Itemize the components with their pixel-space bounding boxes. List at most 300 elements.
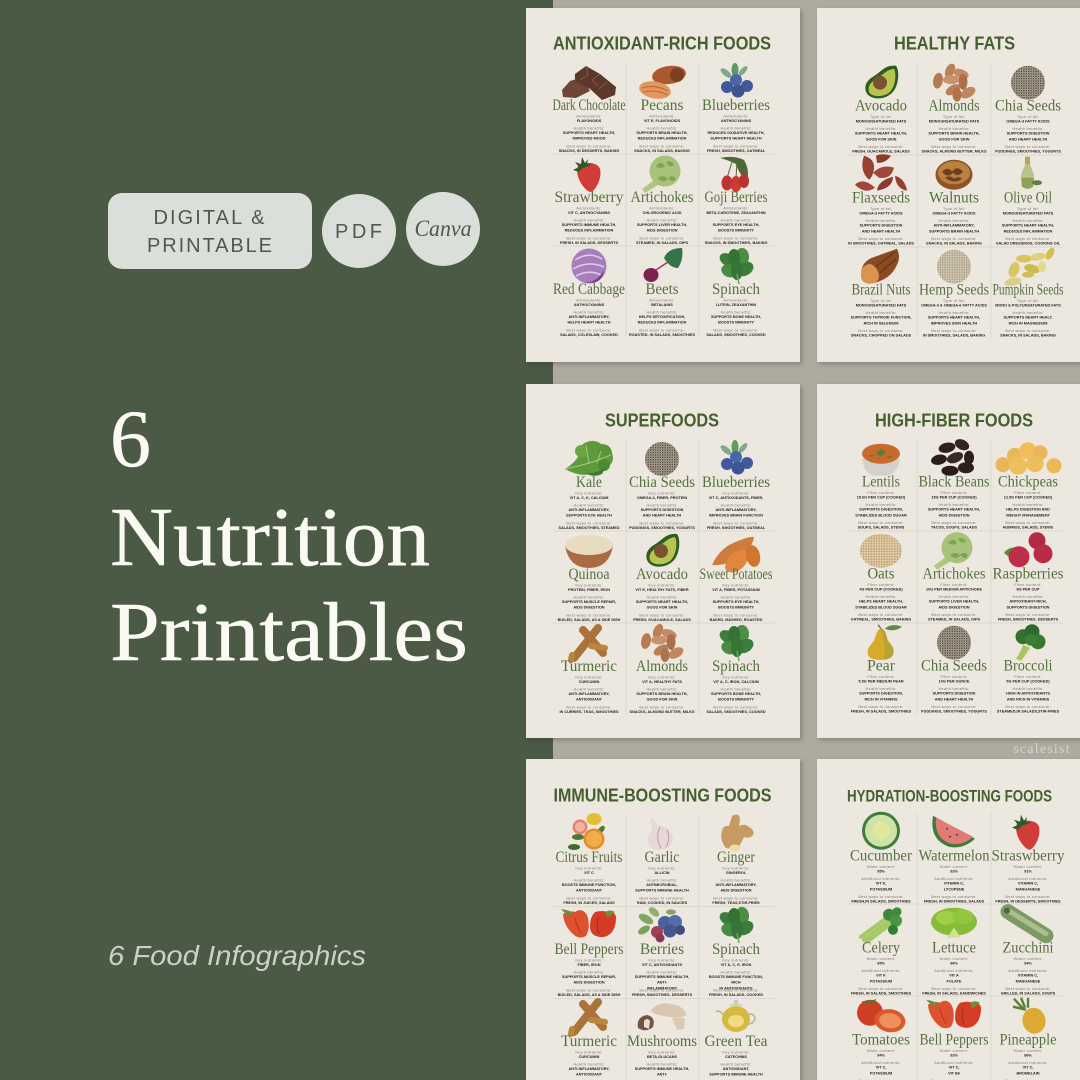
details: Best ways to consume: xyxy=(639,895,685,900)
details: Health benefits: xyxy=(720,125,752,130)
details: Best ways to consume: xyxy=(639,987,685,992)
details: FIBER, IRON xyxy=(578,963,601,967)
details: FRESH, IN SALADS, SANDWICHES xyxy=(922,992,986,996)
icon: bell peppers xyxy=(926,1000,981,1028)
details: VIT A, C, IRON, CALCIUM xyxy=(713,680,759,684)
details: HELPS DETOXIFICATION, xyxy=(639,315,685,319)
details xyxy=(851,582,911,622)
details: FRESH, IN DESSERTS, SMOOTHIES xyxy=(995,900,1061,904)
icon: oats xyxy=(860,534,902,568)
name: Beets xyxy=(646,281,678,298)
cell: Chia Seeds xyxy=(995,66,1061,154)
name: Cucumber xyxy=(850,848,913,865)
details: RICH IN MAGNESIUM xyxy=(1009,321,1047,325)
details: Fiber content: xyxy=(867,674,895,679)
details xyxy=(922,956,986,996)
details: SUPPORTS BRAIN HEALTH, xyxy=(636,692,688,696)
details: AND HEART HEALTH xyxy=(862,229,901,233)
details: Health benefits: xyxy=(938,594,970,599)
circle badge: Canva xyxy=(406,192,480,266)
details: Additional nutrients: xyxy=(934,1060,974,1065)
name: Goji Berries xyxy=(704,189,768,206)
name: Hemp Seeds xyxy=(919,282,989,299)
details: SUPPORTS DIGESTION xyxy=(1007,132,1050,136)
cell: Pecans xyxy=(634,64,690,153)
details: Fiber content: xyxy=(1014,490,1042,495)
details: ANTI-INFLAMMATORY, xyxy=(568,508,610,512)
details: SNACKS, IN SALADS, BAKING xyxy=(926,242,982,246)
name: Chickpeas xyxy=(998,474,1058,491)
name: Brazil Nuts xyxy=(852,282,910,299)
details: SUPPORTS DIGESTION xyxy=(933,692,976,696)
name: Pineapple xyxy=(1000,1032,1056,1049)
cell: Green Tea xyxy=(704,1000,768,1077)
details: Health benefits: xyxy=(646,125,678,130)
details xyxy=(706,297,766,337)
name: Raspberries xyxy=(992,566,1064,583)
details: FRESH, SMOOTHIES, OATMEAL xyxy=(707,149,766,153)
details: 92% xyxy=(950,1054,958,1058)
details: Antioxidants: xyxy=(576,205,602,210)
main title: Printables xyxy=(110,586,468,679)
details: Antioxidants: xyxy=(649,297,675,302)
details xyxy=(921,114,987,154)
details: 94% xyxy=(1024,962,1032,966)
details: Key nutrients: xyxy=(648,490,676,495)
details: AIDS DIGESTION xyxy=(938,605,970,609)
details: VIT A, HEALTHY FATS xyxy=(642,680,682,684)
details: SUPPORTS IMMUNE HEALTH xyxy=(635,889,689,893)
details: SUPPORTS DIGESTION xyxy=(641,508,684,512)
details: BETALAINS xyxy=(651,303,673,307)
details xyxy=(629,674,695,714)
details: ANTIMICROBIAL, xyxy=(646,883,678,887)
details: Best ways to consume: xyxy=(858,612,904,617)
icon: spinach xyxy=(717,907,756,943)
details xyxy=(851,864,911,904)
name: Walnuts xyxy=(929,190,979,207)
name: Sweet Potatoes xyxy=(700,566,772,583)
details: Health benefits: xyxy=(646,877,678,882)
details xyxy=(635,1049,689,1077)
details: VIT C, ANTIOXIDANTS xyxy=(642,963,683,967)
details: OMEGA-3, FIBER, PROTEIN xyxy=(637,496,687,500)
name: Lentils xyxy=(862,474,900,491)
heading: ANTIOXIDANT-RICH FOODS xyxy=(553,32,771,54)
panel: Hydration-boosting foods xyxy=(817,759,1080,1080)
details xyxy=(848,206,914,246)
cell: Citrus Fruits xyxy=(556,813,622,905)
details: Key nutrients: xyxy=(722,957,750,962)
cell: Straswberry xyxy=(992,815,1064,904)
details: GINGEROL xyxy=(726,871,747,875)
icon: artichoke xyxy=(934,532,972,570)
details: REDUCES INFLAMMATION xyxy=(1004,229,1053,233)
details: Best ways to consume: xyxy=(1005,894,1051,899)
icon: black beans xyxy=(930,437,974,476)
details xyxy=(855,490,907,530)
details: Best ways to consume: xyxy=(566,143,612,148)
details: 94% xyxy=(877,1054,885,1058)
details xyxy=(559,113,619,153)
details: ANTI-INFLAMMATORY, xyxy=(568,315,610,319)
details: Water content: xyxy=(940,1048,968,1053)
circle badge: PDF xyxy=(322,194,396,268)
pill badge: digital & printable: DIGITAL & xyxy=(154,207,266,229)
details: PUDDINGS, SMOOTHIES, YOGURTS xyxy=(995,150,1061,154)
details: AND HEART HEALTH xyxy=(1009,137,1048,141)
details: Key nutrients: xyxy=(648,1049,676,1054)
name: Kale xyxy=(576,474,602,491)
details: SALAD DRESSINGS, COOKING OIL xyxy=(996,242,1061,246)
icon: turmeric xyxy=(571,628,605,660)
cell: Beets xyxy=(629,248,695,337)
details: Health benefits: xyxy=(573,125,605,130)
name: Watermelon xyxy=(918,848,990,865)
details: Type of fat: xyxy=(943,206,965,211)
details: VIT K, xyxy=(876,882,886,886)
details: SNACKS, IN SMOOTHIES, BAKING xyxy=(705,241,767,245)
details: Best ways to consume: xyxy=(713,704,759,709)
cell: Flaxseeds xyxy=(848,154,914,246)
icon: avocado xyxy=(865,66,898,98)
details: IMPROVES BRAIN FUNCTION xyxy=(709,514,763,518)
details: REDUCES OXIDATIVE HEALTH, xyxy=(707,131,765,135)
name: Turmeric xyxy=(561,1033,617,1050)
details: POTASSIUM xyxy=(870,979,892,983)
details: 5G PER CUP (COOKED) xyxy=(1006,680,1050,684)
details: Health benefits: xyxy=(720,877,752,882)
details: Health benefits: xyxy=(865,594,897,599)
details: Key nutrients: xyxy=(575,957,603,962)
name: Chia Seeds xyxy=(629,474,695,491)
details: Health benefits: xyxy=(646,309,678,314)
circle badge: PDF: PDF xyxy=(335,221,384,243)
details: OMEGA-3 & OMEGA-6 FATTY ACIDS xyxy=(921,304,987,308)
details: FRESH, IN SALADS, SMOOTHIES xyxy=(851,992,912,996)
details: ANTI- xyxy=(657,981,668,985)
details: Best ways to consume: xyxy=(713,143,759,148)
icon: blueberries xyxy=(719,440,753,474)
details: Best ways to consume: xyxy=(1005,704,1051,709)
cell: Sweet Potatoes xyxy=(700,537,772,622)
details xyxy=(560,205,618,245)
cell: Almonds xyxy=(629,622,695,714)
details: 95% xyxy=(877,870,885,874)
icon: turmeric xyxy=(571,1002,605,1034)
cell: Brazil Nuts xyxy=(851,249,912,338)
details: SUPPORTS MUSCLE REPAIR, xyxy=(562,600,616,604)
details: Health benefits: xyxy=(573,217,605,222)
name: Artichokes xyxy=(922,566,986,583)
details: Health benefits: xyxy=(865,218,897,223)
name: Avocado xyxy=(636,566,688,583)
panel: Antioxidant-rich foods xyxy=(526,8,800,362)
name: Avocado xyxy=(855,98,907,115)
details: VIT A, C, E, IRON xyxy=(721,963,752,967)
icon: goji berries xyxy=(720,157,749,192)
details xyxy=(996,206,1061,246)
details: Key nutrients: xyxy=(722,490,750,495)
details: Antioxidants: xyxy=(723,297,749,302)
details xyxy=(559,674,619,714)
details: Best ways to consume: xyxy=(566,520,612,525)
details: 12.5G PER CUP (COOKED) xyxy=(1004,496,1053,500)
cell: Almonds xyxy=(921,62,987,154)
icon: broccoli xyxy=(1016,624,1046,661)
details: Health benefits: xyxy=(1012,686,1044,691)
details: GOOD FOR SKIN xyxy=(647,606,678,610)
details: Best ways to consume: xyxy=(1005,612,1051,617)
main title xyxy=(110,393,468,679)
details: VIT C, xyxy=(1023,1066,1033,1070)
details: ANTI- xyxy=(657,1073,668,1077)
details: SUPPORTS IMMUNE HEALTH, xyxy=(635,975,689,979)
details: RICH xyxy=(731,981,741,985)
cell: Lettuce xyxy=(922,908,986,996)
details: SUPPORTS THYROID FUNCTION, xyxy=(851,316,911,320)
details: SUPPORTS HEART HEALTH, xyxy=(636,600,688,604)
details: VIT A xyxy=(949,974,959,978)
name: Bell Peppers xyxy=(920,1032,988,1049)
details: VIT C, ANTIOXIDANTS, FIBER, xyxy=(709,496,763,500)
cell: Spinach xyxy=(709,907,763,997)
details: Health benefits: xyxy=(573,594,605,599)
details: STEAMED,IN SALADS,STIR-FRIES xyxy=(997,710,1060,714)
details: PUDDINGS, SMOOTHIES, YOGURTS xyxy=(921,710,987,714)
details: 5.5G PER MEDIUM PEAR xyxy=(858,680,904,684)
details: Health benefits: xyxy=(646,969,678,974)
details: Health benefits: xyxy=(720,502,752,507)
details xyxy=(924,864,985,904)
details: VITAMIN C, xyxy=(944,882,964,886)
details: Best ways to consume: xyxy=(931,986,977,991)
details: SUPPORTS LIVER HEALTH, xyxy=(929,600,979,604)
details: Health benefits: xyxy=(646,686,678,691)
name: Pear xyxy=(867,658,896,675)
details: Health benefits: xyxy=(573,1061,605,1066)
name: Black Beans xyxy=(918,474,990,491)
details: Best ways to consume: xyxy=(858,704,904,709)
details: IN SMOOTHIES, SALADS, BAKING xyxy=(923,334,985,338)
icon: strawberry xyxy=(573,157,600,192)
icon: pumpkin seeds xyxy=(1004,246,1056,287)
name: Celery xyxy=(862,940,900,957)
icon: watermelon xyxy=(932,816,975,847)
cell: Kale xyxy=(558,441,620,530)
details: Best ways to consume: xyxy=(713,235,759,240)
details: Key nutrients: xyxy=(575,674,603,679)
main title: 6 xyxy=(110,393,151,484)
details: Antioxidants: xyxy=(723,113,749,118)
details: MONOUNSATURATED FATS xyxy=(1003,212,1054,216)
details: AIDS DIGESTION xyxy=(720,889,752,893)
name: Zucchini xyxy=(1002,940,1054,957)
icon: avocado xyxy=(646,534,679,567)
details: OATMEAL, SMOOTHIES, BAKING xyxy=(851,618,911,622)
details: SUPPORTS HEART HEALTH, xyxy=(928,316,980,320)
details: Health benefits: xyxy=(938,126,970,131)
details: HELPS DIGESTION AND xyxy=(1006,508,1050,512)
details: Best ways to consume: xyxy=(1005,236,1051,241)
cell: Turmeric xyxy=(561,1002,617,1077)
details xyxy=(558,490,620,530)
details: Best ways to consume: xyxy=(639,143,685,148)
cell: Ginger xyxy=(712,815,760,905)
details: MONOUNSATURATED FATS xyxy=(929,120,980,124)
details: AIDS DIGESTION xyxy=(573,606,605,610)
details: Key nutrients: xyxy=(575,582,603,587)
details: CURCUMIN xyxy=(579,1055,600,1059)
details: SUPPORTS LIVER HEALTH, xyxy=(637,223,687,227)
details xyxy=(633,582,691,622)
details: 86% xyxy=(1024,1054,1032,1058)
details: Health benefits: xyxy=(1012,218,1044,223)
details: Key nutrients: xyxy=(648,582,676,587)
details: Type of fat: xyxy=(943,298,965,303)
icon: berries xyxy=(637,905,685,942)
details: OMEGA-3 FATTY ACIDS xyxy=(932,212,976,216)
details: REDUCES INFLAMMATION xyxy=(638,137,687,141)
details: Best ways to consume: xyxy=(566,895,612,900)
details: Health benefits: xyxy=(1012,310,1044,315)
details: BOOSTS IMMUNE FUNCTION, xyxy=(562,883,616,887)
cell: Raspberries xyxy=(992,532,1064,622)
details: Fiber content: xyxy=(1014,582,1042,587)
details: BOILED, SALADS, AS A SIDE DISH xyxy=(558,993,621,997)
details xyxy=(921,674,987,714)
details: IMPROVES SKIN HEALTH xyxy=(931,321,977,325)
details: OMEGA-3 FATTY ACIDS xyxy=(1006,120,1050,124)
details: SUPPORTS BONE HEALTH, xyxy=(711,315,761,319)
details: Key nutrients: xyxy=(648,957,676,962)
details: 92% xyxy=(950,870,958,874)
icon: chia seeds xyxy=(645,442,679,476)
details: Key nutrients: xyxy=(575,490,603,495)
details: SUPPORTS BRAIN HEALTH, xyxy=(636,131,688,135)
details: 4G PER CUP (COOKED) xyxy=(859,588,903,592)
details xyxy=(632,957,693,997)
cell: Strawberry xyxy=(554,157,624,245)
details: PUDDINGS, SMOOTHIES, YOGURTS xyxy=(629,526,695,530)
icon: mushrooms xyxy=(638,1003,686,1031)
details: VIT E, HEALTHY FATS, FIBER xyxy=(635,588,689,592)
name: Olive Oil xyxy=(1004,190,1052,207)
details xyxy=(1003,490,1054,530)
details: Best ways to consume: xyxy=(858,894,904,899)
details: BROMELAIN xyxy=(1016,1071,1040,1075)
name: Ginger xyxy=(717,849,756,866)
details: SALADS, COLESLAW, COOKED xyxy=(560,333,618,337)
details: SUPPORTS DIGESTION xyxy=(860,224,903,228)
details: 91% xyxy=(1024,870,1032,874)
details xyxy=(1001,956,1056,996)
details: ANTHOCYANINS xyxy=(574,303,605,307)
details xyxy=(926,206,982,246)
details: Water content: xyxy=(867,864,895,869)
details: Key nutrients: xyxy=(722,865,750,870)
details: TACOS, SOUPS, SALADS xyxy=(931,526,978,530)
details xyxy=(995,114,1061,154)
details: Best ways to consume: xyxy=(713,895,759,900)
details: ANTI-INFLAMMATORY, xyxy=(568,692,610,696)
details: AND RICH IN VITAMINS xyxy=(1007,697,1050,701)
cell: Turmeric xyxy=(559,628,619,714)
details: RICH IN SELENIUM xyxy=(864,321,898,325)
details: VITAMIN C, xyxy=(1018,974,1038,978)
name: Straswberry xyxy=(992,848,1064,865)
icon: lentils xyxy=(862,444,900,476)
icon: tomatoes xyxy=(857,1000,907,1034)
cell: Pineapple xyxy=(1000,998,1056,1080)
details: STEAMED, IN SALADS, DIPS xyxy=(928,618,981,622)
details: Antioxidants: xyxy=(576,113,602,118)
details: Best ways to consume: xyxy=(931,704,977,709)
details: Health benefits: xyxy=(646,1061,678,1066)
details: SOUPS, SALADS, STEWS xyxy=(858,526,905,530)
details: Health benefits: xyxy=(573,502,605,507)
name: Pecans xyxy=(640,97,684,114)
name: Mushrooms xyxy=(627,1033,697,1050)
details: VITAMIN C, xyxy=(1018,882,1038,886)
details: Key nutrients: xyxy=(722,674,750,679)
details: CATECHINS xyxy=(725,1055,747,1059)
details: RAW, COOKED, IN SAUCES xyxy=(637,901,688,905)
details: Best ways to consume: xyxy=(931,612,977,617)
icon: citrus fruits xyxy=(568,813,606,850)
details: Key nutrients: xyxy=(648,865,676,870)
details: SUPPORTS HEART HEALTH, xyxy=(563,131,615,135)
details: FRESH, IN JUICES, SALADS xyxy=(563,901,615,905)
panel: Immune-boosting foods xyxy=(526,759,800,1080)
details xyxy=(709,957,763,997)
details: SUPPORTS IMMUNE HEALTH, xyxy=(635,1067,689,1071)
details: WEIGHT MANAGEMENT xyxy=(1006,513,1051,517)
details: VIT C, xyxy=(949,1066,959,1070)
details xyxy=(852,114,910,154)
icon: almonds xyxy=(640,622,685,662)
details: IN SMOOTHIES, OATMEAL, SALADS xyxy=(848,242,914,246)
details: SUPPORTS BONE HEALTH, xyxy=(711,692,761,696)
icon: hemp seeds xyxy=(937,250,971,284)
details xyxy=(558,957,621,997)
details: Health benefits: xyxy=(720,686,752,691)
details xyxy=(568,1049,610,1077)
details: Best ways to consume: xyxy=(713,612,759,617)
details: Best ways to consume: xyxy=(858,520,904,525)
cell: Avocado xyxy=(852,66,910,154)
details: REDUCES INFLAMMATION xyxy=(638,321,687,325)
details: 15.6G PER CUP (COOKED) xyxy=(857,496,906,500)
details: 8G PER CUP xyxy=(1016,588,1040,592)
details: Key nutrients: xyxy=(575,1049,603,1054)
details: Type of fat: xyxy=(870,114,892,119)
name: Artichokes xyxy=(630,189,694,206)
details: HUMMUS, SALADS, STEWS xyxy=(1003,526,1054,530)
icon: kale xyxy=(565,441,613,476)
icon: sweet potatoes xyxy=(712,537,762,572)
details: VIT E, FLAVONOIDS xyxy=(644,119,681,123)
details: BETA-GLUCANS xyxy=(647,1055,678,1059)
details: Type of fat: xyxy=(943,114,965,119)
cell: Olive Oil xyxy=(996,157,1061,246)
icon: beets xyxy=(644,248,682,282)
name: Chia Seeds xyxy=(995,98,1061,115)
cell: Mushrooms xyxy=(627,1003,697,1077)
cell: Lentils xyxy=(855,444,907,530)
details: CHLOROGENIC ACID xyxy=(643,211,682,215)
name: Strawberry xyxy=(554,189,624,206)
